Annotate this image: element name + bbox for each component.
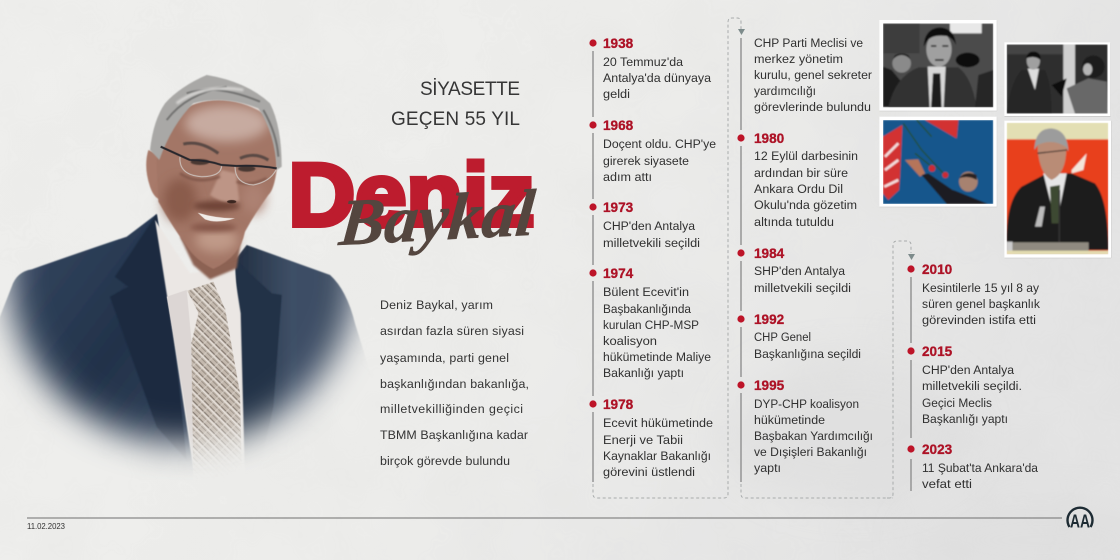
entry 1995: ve Dışişleri Bakanlığı: [754, 445, 867, 459]
subtitle: [391, 79, 520, 130]
entry 1974: koalisyon: [603, 334, 657, 348]
entry 1974: Bülent Ecevit'in: [603, 285, 689, 299]
left ear: [146, 150, 159, 200]
left lapel: [110, 214, 187, 460]
intro paragraph: Deniz Baykal, yarım: [380, 298, 493, 312]
entry 1973: [589, 200, 700, 250]
entry 2010: süren genel başkanlık: [922, 297, 1041, 311]
glasses lenses: [180, 157, 276, 185]
entry 2010: 2010: [922, 262, 952, 277]
entry 1978: 1978: [603, 397, 634, 412]
timeline rail 1: [592, 51, 594, 482]
entry 1980: ardından bir süre: [754, 166, 848, 180]
entry CHP Parti Meclisi: kurulu, genel sekreter: [754, 68, 872, 82]
entry 1984: 1984: [754, 246, 785, 261]
entry 1992: CHP Genel: [754, 330, 811, 344]
entry 1980: 1980: [754, 131, 784, 146]
entry 1968: Doçent oldu. CHP'ye: [603, 137, 716, 151]
neck: [180, 237, 242, 279]
entry CHP Parti Meclisi: yardımcılığı: [754, 84, 816, 98]
entry 1980: Ankara Ordu Dil: [754, 182, 843, 196]
entry 1974: Başbakanlığında: [603, 302, 691, 316]
entry 1974: [589, 266, 711, 380]
entry 1974: Bakanlığı yaptı: [603, 366, 684, 380]
entry 1992: Başkanlığına seçildi: [754, 347, 861, 361]
entry 1978: Ecevit hükümetinde: [603, 416, 713, 430]
connector 2 to 3: [741, 241, 911, 498]
entry 1992: 1992: [754, 312, 785, 327]
entry 1978: Enerji ve Tabii: [603, 433, 683, 447]
entry 2015: CHP'den Antalya: [922, 363, 1014, 377]
entry 2015: 2015: [922, 344, 953, 359]
eyes: [191, 159, 209, 165]
entry 1992: [737, 312, 861, 361]
logo: AA: [1067, 508, 1092, 532]
smile teeth: [198, 213, 235, 221]
right lapel: [235, 268, 282, 422]
entry 2023: 11 Şubat'ta Ankara'da: [922, 461, 1038, 475]
connector end stub: [887, 497, 893, 499]
entry CHP Parti Meclisi: [754, 36, 872, 114]
entry 1973: milletvekili seçildi: [603, 236, 700, 250]
entry 1938: 20 Temmuz'da: [603, 55, 683, 69]
entry 2010: [907, 262, 1041, 327]
entry 1938: geldi: [603, 87, 630, 101]
upper lip shadow: [193, 201, 240, 211]
hair highlights: [177, 88, 243, 103]
entry 1980: [737, 131, 858, 229]
entry 1980: Okulu'nda gözetim: [754, 198, 857, 212]
entry 1968: 1968: [603, 118, 634, 133]
entry CHP Parti Meclisi: merkez yönetim: [754, 52, 843, 66]
logo: AA: AA: [1070, 512, 1090, 532]
timeline column 2: [737, 36, 915, 498]
date: 11.02.2023: [27, 522, 65, 531]
shirt collar shadow: [166, 290, 192, 444]
subtitle: GEÇEN 55 YIL: [391, 109, 520, 130]
timeline rail 2: [740, 38, 742, 482]
hair strands: [167, 87, 278, 157]
footer rule: [27, 517, 1062, 519]
entry 2023: vefat etti: [922, 477, 972, 491]
intro paragraph: milletvekilliğinden geçici: [380, 402, 523, 416]
entry 1968: adım attı: [603, 170, 652, 184]
name title: [288, 144, 538, 260]
entry CHP Parti Meclisi: CHP Parti Meclisi ve: [754, 36, 863, 50]
intro paragraph: birçok görevde bulundu: [380, 454, 510, 468]
entry 2010: Kesintilerle 15 yıl 8 ay: [922, 281, 1040, 295]
entry 1938: 1938: [603, 36, 634, 51]
chin highlight: [195, 227, 238, 253]
nose: [210, 170, 239, 202]
shirt: [155, 220, 245, 480]
entry 1938: [589, 36, 711, 101]
eyebrows: [183, 143, 268, 160]
jacket right side: [234, 244, 364, 452]
tie blade: [191, 308, 242, 480]
arrow 1: [738, 29, 745, 35]
nostril: [227, 200, 236, 203]
forehead highlight: [185, 105, 268, 142]
entry 1973: 1973: [603, 200, 634, 215]
under-eye shading: [180, 173, 267, 184]
connector 1 to 2: [593, 18, 741, 498]
entry 2015: Geçici Meclis: [922, 396, 992, 410]
entry 1978: [589, 397, 713, 479]
entry 2010: görevinden istifa etti: [922, 313, 1036, 327]
entry 1980: 12 Eylül darbesinin: [754, 149, 858, 163]
portrait of Deniz Baykal: [0, 75, 377, 480]
entry 2015: [907, 344, 1022, 426]
timeline column 3: [887, 262, 1041, 498]
timeline column 1: [589, 18, 745, 498]
entry 1973: CHP'den Antalya: [603, 219, 695, 233]
hair: [150, 75, 282, 170]
entry 2015: Başkanlığı yaptı: [922, 412, 1008, 426]
intro paragraph: TBMM Başkanlığına kadar: [380, 428, 528, 442]
entry 1995: 1995: [754, 378, 785, 393]
photo: Baykal at podium: [1004, 121, 1111, 258]
entry 1938: Antalya'da dünyaya: [603, 71, 711, 85]
entry 1995: Başbakan Yardımcılığı: [754, 429, 873, 443]
intro paragraph: asırdan fazla süren siyasi: [380, 324, 524, 338]
entry 2023: [907, 442, 1038, 491]
entry CHP Parti Meclisi: görevlerinde bulundu: [754, 100, 871, 114]
lower lip shadow: [190, 223, 237, 232]
entry 2015: milletvekili seçildi.: [922, 379, 1022, 393]
entry 1980: altında tutuldu: [754, 215, 834, 229]
photo collage: [879, 20, 1111, 258]
face base: [157, 100, 277, 269]
entry 1968: girerek siyasete: [603, 154, 689, 168]
entry 2023: 2023: [922, 442, 953, 457]
photo: young Baykal portrait: [879, 20, 997, 111]
entry 1978: Kaynaklar Bakanlığı: [603, 449, 711, 463]
entry 1995: hükümetinde: [754, 413, 825, 427]
jacket left side: [0, 214, 197, 480]
right cheek highlight: [242, 183, 265, 213]
Baykal: Baykal: [336, 177, 538, 260]
glasses temple and bar: [161, 147, 277, 168]
intro paragraph: yaşamında, parti genel: [380, 351, 509, 365]
intro paragraph: başkanlığından bakanlığa,: [380, 377, 529, 391]
intro paragraph: [380, 298, 529, 468]
head: [146, 75, 282, 279]
entry 1984: [737, 246, 851, 295]
arrow 2: [908, 254, 915, 260]
tie knot: [187, 282, 225, 313]
entry 1995: yaptı: [754, 461, 781, 475]
entry 1974: 1974: [603, 266, 634, 281]
entry 1995: [737, 378, 873, 475]
entry 1984: SHP'den Antalya: [754, 264, 845, 278]
photo: Baykal with reporter: [1004, 42, 1110, 116]
entry 1968: [589, 118, 716, 184]
Deniz: Deniz: [288, 144, 534, 244]
left cheek shading: [163, 178, 197, 222]
subtitle: SİYASETTE: [420, 79, 520, 100]
photo: rally with carnations: [879, 117, 997, 207]
entry 1984: milletvekili seçildi: [754, 281, 851, 295]
entry 1978: görevini üstlendi: [603, 465, 695, 479]
timeline rail 3: [910, 277, 912, 491]
entry 1995: DYP-CHP koalisyon: [754, 397, 859, 411]
entry 1974: hükümetinde Maliye: [603, 350, 711, 364]
entry 1974: kurulan CHP-MSP: [603, 318, 699, 332]
